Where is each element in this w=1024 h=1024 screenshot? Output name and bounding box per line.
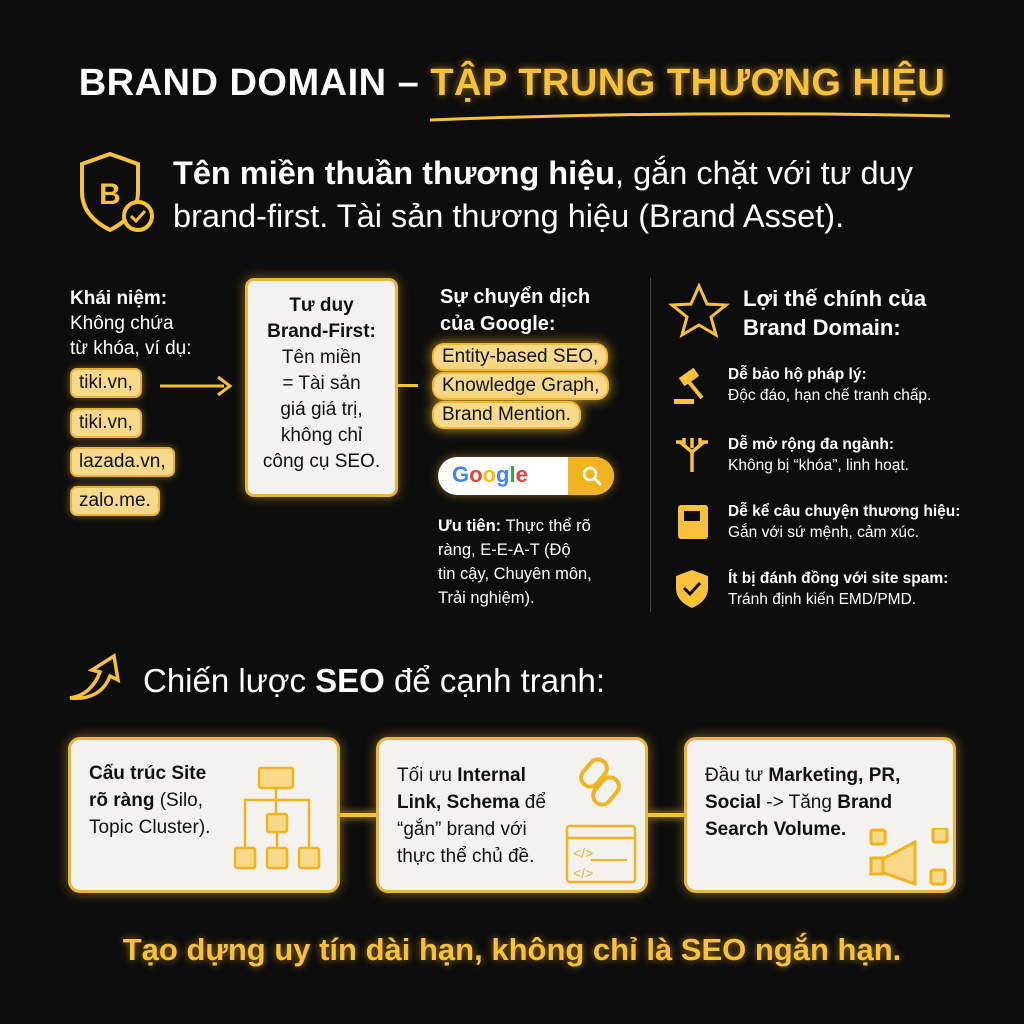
advantage: spam: Tránh định kiến EMD/PMD. [728,591,916,608]
advantage: spam: Ít bị đánh đồng với site spam: [728,570,948,587]
box: brand-first: không chỉ [281,425,362,446]
card: marketing: Đầu tư Marketing, PR, [705,765,900,786]
priority text: Ưu tiên: Thực thể rõ [438,517,591,535]
chips: domains [64,362,180,522]
google search bar: Google [452,462,528,487]
advantage: legal [674,365,931,404]
box: brand-first: công cụ SEO. [263,451,380,472]
chips: domains: tiki.vn, [79,372,133,393]
title underline [430,112,950,122]
icon: shield [80,152,154,232]
box: brand-first: giá giá trị, [280,399,363,420]
icon: rising arrow [70,653,120,700]
intro text [173,155,913,234]
card: internal link: </> [573,865,593,881]
connectors [340,813,376,817]
box: brand-first: Tên miền [282,347,361,368]
chips: google: Entity-based SEO, [442,346,598,367]
advantage: story: Gắn với sứ mệnh, cảm xúc. [728,524,919,541]
card: internal link: thực thể chủ đề. [397,846,534,867]
advantage: legal: Độc đáo, hạn chế tranh chấp. [728,387,931,404]
card: site structure [68,737,340,893]
advantage: expand: Không bị “khóa”, linh hoạt. [728,457,909,474]
divider [650,278,651,612]
strategy heading: Chiến lược SEO để cạnh tranh: [143,662,605,699]
advantage: expand [676,435,909,474]
box: brand-first: Tư duy [289,295,354,316]
chips: domains: lazada.vn, [79,451,166,472]
concept text [70,288,192,359]
chips: google: Brand Mention. [442,404,571,425]
advantage: spam [676,569,948,608]
advantage: story: Dễ kể câu chuyện thương hiệu: [728,503,960,520]
advantages heading [743,286,926,340]
priority text: tin cậy, Chuyên môn, [438,565,592,583]
box: brand-first: Brand-First: [267,321,376,342]
card: internal link: Link, Schema để [397,792,546,813]
google shift heading: Sự chuyển dịch [440,286,590,308]
arrow [160,376,232,396]
icon: star [668,282,730,338]
advantages heading: Lợi thế chính của [743,286,926,311]
concept text: Khái niệm: [70,288,167,309]
chips: domains: tiki.vn, [79,412,133,433]
bottom tagline: Tạo dựng uy tín dài hạn, không chỉ là SEO ngắn hạn. [123,932,901,967]
chips: google: Knowledge Graph, [442,375,599,396]
google search bar [438,457,614,495]
advantages heading: Brand Domain: [743,315,901,340]
intro text: brand-first. Tài sản thương hiệu (Brand Asset). [173,198,844,234]
card: marketing: Search Volume. [705,819,846,840]
card: site structure: Topic Cluster). [89,817,210,838]
priority text: ràng, E-E-A-T (Độ [438,541,571,559]
card: internal link: </> [573,845,593,861]
concept text: Không chứa [70,313,174,334]
title: BRAND DOMAIN – TẬP TRUNG THƯƠNG HIỆU [79,62,945,104]
advantage: legal: Dễ bảo hộ pháp lý: [728,366,867,383]
priority text: Trải nghiệm). [438,589,535,607]
intro text: Tên miền thuần thương hiệu, gắn chặt với tư duy [173,155,913,191]
card: internal link: “gắn” brand với [397,819,527,840]
card: site structure: Cấu trúc Site [89,763,206,784]
connector [398,384,418,387]
card: internal link [376,737,648,893]
card: marketing: Social -> Tăng Brand [705,792,892,813]
google shift heading: của Google: [440,313,556,335]
concept text: từ khóa, ví dụ: [70,338,192,359]
advantage: expand: Dễ mở rộng đa ngành: [728,436,894,453]
priority text [438,517,592,607]
icon: shield: B [99,178,121,211]
box: brand-first: = Tài sản [282,373,361,394]
advantage: story [678,502,960,541]
card: internal link: Tối ưu Internal [397,765,526,786]
card: marketing [684,737,956,893]
google shift heading [440,286,590,335]
chips: google [423,333,618,439]
card: site structure: rõ ràng (Silo, [89,790,203,811]
chips: domains: zalo.me. [79,490,151,511]
box: brand-first [245,278,398,497]
